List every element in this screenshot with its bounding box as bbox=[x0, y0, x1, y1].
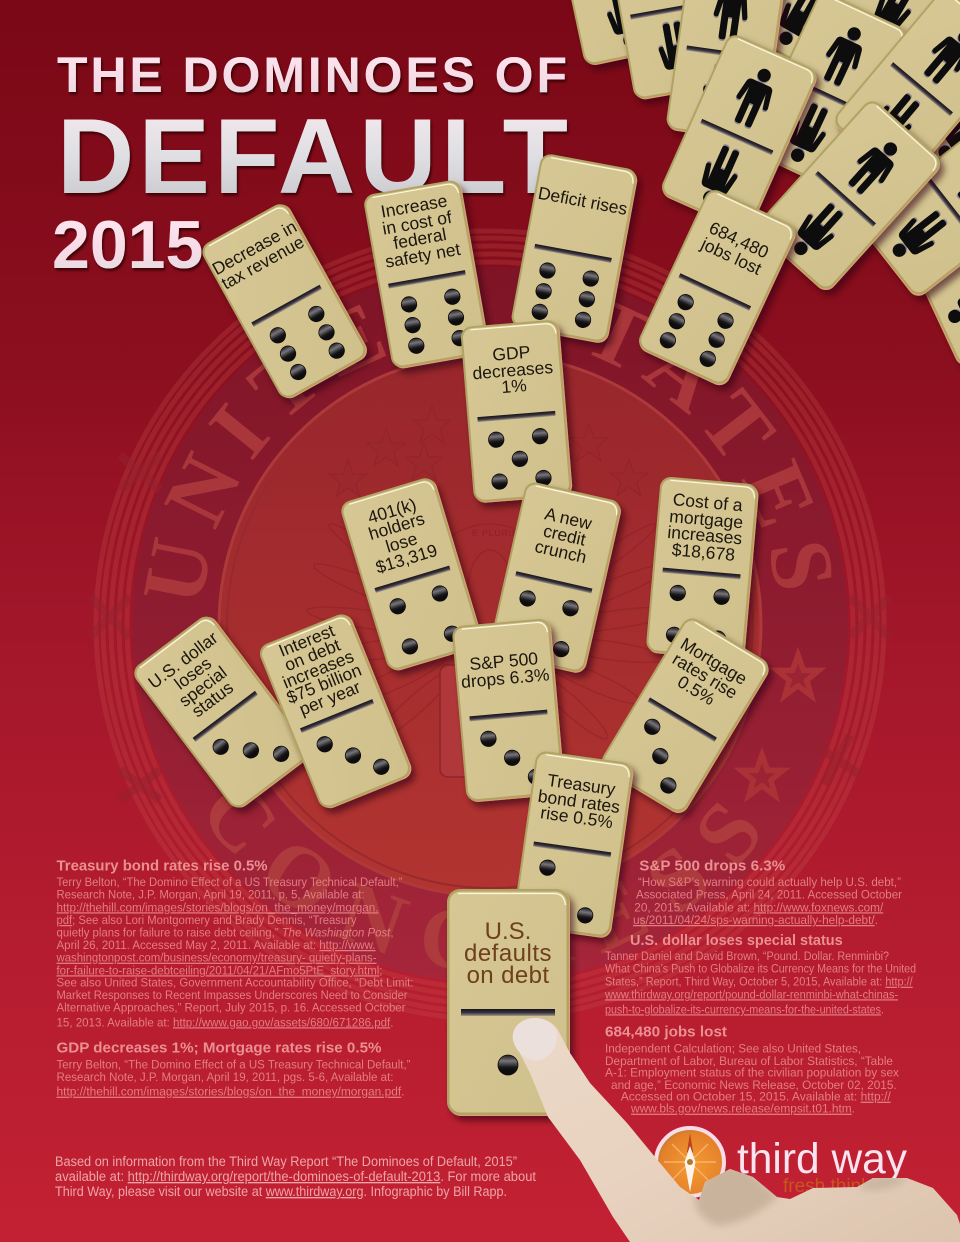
title: THE DOMINOES OF bbox=[57, 47, 567, 103]
sources: left column: for-failure-to-raise-debtceiling/2011/04/21/AFmo5PtE_story.html; bbox=[56, 963, 383, 977]
domino: Mortgage rates rise 0.5%: rates rise bbox=[669, 649, 741, 703]
domino: person M bbox=[903, 20, 960, 203]
domino: A new credit crunch: crunch bbox=[533, 536, 589, 567]
domino: GDP decreases 1% bbox=[460, 319, 573, 504]
congressional seal backdrop: E PLURIBUS UNUM bbox=[472, 528, 565, 538]
sources: right column: What China’s Push to Globalize its Currency Means for the United bbox=[605, 962, 916, 976]
title bbox=[52, 47, 568, 283]
domino: U.S. dollar loses special status: U.S. dollar bbox=[144, 627, 222, 693]
domino: A new credit crunch bbox=[487, 480, 623, 675]
sources: left column: http://thehill.com/images/stories/blogs/on_the_money/morgan. bbox=[56, 900, 378, 914]
domino: Cost of a mortgage increases $18,678 bbox=[645, 476, 759, 661]
domino: 401(k) holders lose $13,319: lose bbox=[383, 528, 420, 557]
logo: third way: third way bbox=[737, 1135, 907, 1183]
domino: person L bbox=[919, 204, 960, 369]
sources: left column: See also United States, Government Accountability Office, “Debt Limit: bbox=[56, 976, 414, 990]
sources: right column bbox=[604, 859, 916, 1116]
domino: person A bbox=[549, 0, 682, 67]
domino: U.S. dollar loses special status: special bbox=[175, 662, 231, 711]
domino: Cost of a mortgage increases $18,678: mortgage bbox=[669, 506, 744, 532]
domino: Decrease in tax revenue: Decrease in bbox=[209, 216, 300, 279]
domino: U.S. dollar loses special status: status bbox=[188, 677, 237, 721]
domino: U.S. defaults on debt bbox=[447, 889, 570, 1116]
domino: U.S. defaults on debt: defaults bbox=[464, 940, 552, 967]
sources: left column: Alternative Approaches,” Report, July 2015, p. 16. Accessed October bbox=[56, 1001, 406, 1015]
domino: Increase in cost of federal safety net: safety net bbox=[384, 239, 462, 272]
sources: right column: push-to-globalize-its-currency-means-for-the-united-states. bbox=[605, 1002, 884, 1016]
domino: 684,480 jobs lost: 684,480 bbox=[706, 217, 772, 262]
sources: left column bbox=[56, 859, 414, 1099]
sources: right column: “How S&P’s warning could actually help U.S. debt,” bbox=[638, 875, 901, 889]
sources: right column: 684,480 jobs lost bbox=[605, 1025, 727, 1041]
sources: right column: www.thirdway.org/report/pound-dollar-renminbi-what-chinas- bbox=[604, 987, 898, 1001]
domino: Mortgage rates rise 0.5%: Mortgage bbox=[677, 634, 751, 689]
domino: Treasury bond rates rise 0.5%: bond rates bbox=[537, 786, 622, 817]
sources: left column: Research Note, J.P. Morgan, April 19, 2011, pgs. 5-6, Available at: bbox=[56, 1070, 394, 1084]
domino: S&P 500 drops 6.3%: drops 6.3% bbox=[460, 664, 550, 692]
domino: Cost of a mortgage increases $18,678: $18,678 bbox=[671, 539, 736, 565]
domino: person B bbox=[604, 0, 733, 101]
domino: Decrease in tax revenue bbox=[198, 200, 371, 403]
domino: Treasury bond rates rise 0.5%: Treasury bbox=[546, 770, 617, 799]
congressional seal backdrop: UNITED STATES bbox=[144, 302, 832, 596]
footer credit: Based on information from the Third Way Report “The Dominoes of Default, 2015” bbox=[55, 1154, 517, 1169]
domino: 401(k) holders lose $13,319: holders bbox=[366, 508, 427, 544]
sources: right column: U.S. dollar loses special status bbox=[630, 933, 843, 949]
sources: right column: States,” Report, Third Way, October 5, 2015, Available at: http:// bbox=[605, 975, 913, 989]
domino: Interest on debt increases $75 billion per year: on debt bbox=[282, 635, 343, 675]
domino: Increase in cost of federal safety net: Increase bbox=[379, 190, 449, 222]
domino: 684,480 jobs lost bbox=[635, 187, 800, 389]
domino: person C bbox=[665, 0, 788, 143]
domino: Decrease in tax revenue: tax revenue bbox=[218, 232, 308, 293]
domino: Increase in cost of federal safety net bbox=[362, 179, 491, 370]
sources: right column: S&P 500 drops 6.3% bbox=[639, 859, 785, 875]
domino: Treasury bond rates rise 0.5%: rise 0.5% bbox=[539, 802, 614, 832]
domino: GDP decreases 1%: decreases bbox=[472, 357, 554, 383]
pile of person dominoes bbox=[549, 0, 960, 369]
domino: Interest on debt increases $75 billion per year: $75 billion bbox=[284, 660, 364, 708]
domino: Deficit rises bbox=[510, 153, 639, 345]
logo: third way bbox=[656, 1128, 907, 1197]
sources: right column: Tanner Daniel and David Brown, “Pound. Dollar. Renminbi? bbox=[605, 949, 889, 963]
sources: left column: Terry Belton, “The Domino Effect of a US Treasury Technical Default,” bbox=[56, 875, 402, 889]
domino: Mortgage rates rise 0.5%: 0.5% bbox=[674, 671, 719, 709]
footer credit bbox=[55, 1154, 536, 1199]
hand pressing the domino bbox=[513, 1018, 960, 1242]
domino: person I bbox=[830, 0, 960, 185]
sources: left column: Terry Belton, “The Domino Effect of a US Treasury Technical Default,” bbox=[56, 1057, 410, 1071]
sources: left column: Treasury bond rates rise 0.5% bbox=[56, 859, 268, 875]
domino: 401(k) holders lose $13,319: $13,319 bbox=[373, 540, 440, 577]
domino: S&P 500 drops 6.3%: S&P 500 bbox=[469, 648, 539, 674]
congressional seal backdrop bbox=[94, 228, 886, 1019]
domino: Interest on debt increases $75 billion per year: increases bbox=[280, 646, 357, 693]
domino: Interest on debt increases $75 billion per year: per year bbox=[296, 677, 363, 719]
domino: U.S. defaults on debt: U.S. bbox=[485, 918, 531, 945]
domino: person D bbox=[746, 0, 911, 192]
sources: left column: GDP decreases 1%; Mortgage rates rise 0.5% bbox=[56, 1041, 382, 1057]
domino: Increase in cost of federal safety net: in cost of bbox=[381, 207, 453, 239]
footer credit: Third Way, please visit our website at www.thirdway.org. Infographic by Bill Rapp. bbox=[55, 1184, 507, 1199]
sources: right column: Department of Labor, Bureau of Labor Statistics, “Table bbox=[605, 1054, 893, 1068]
domino: GDP decreases 1%: 1% bbox=[501, 375, 527, 397]
domino: Cost of a mortgage increases $18,678: increases bbox=[667, 522, 743, 548]
fingernail bbox=[513, 1018, 557, 1060]
sources: left column: Research Note, J.P. Morgan, April 19, 2011, p. 5, Available at: bbox=[56, 888, 364, 902]
domino: 401(k) holders lose $13,319 bbox=[339, 475, 485, 673]
domino: Treasury bond rates rise 0.5% bbox=[512, 750, 635, 939]
domino: 684,480 jobs lost: jobs lost bbox=[697, 233, 765, 279]
domino: Increase in cost of federal safety net: federal bbox=[392, 224, 448, 253]
sources: right column: Associated Press, April 24, 2011. Accessed October bbox=[636, 888, 902, 902]
domino: U.S. dollar loses special status bbox=[130, 612, 315, 813]
footer credit: available at: http://thirdway.org/report/the-dominoes-of-default-2013. For more about bbox=[55, 1169, 536, 1184]
sources: left column: April 26, 2011. Accessed May 2, 2011. Available at: http://www. bbox=[56, 938, 376, 952]
domino: Cost of a mortgage increases $18,678: Cost of a bbox=[672, 489, 744, 515]
logo: third way: fresh thinking bbox=[783, 1176, 896, 1197]
sources: right column: and age,” Economic News Release, October 02, 2015. bbox=[611, 1078, 897, 1092]
domino: Interest on debt increases $75 billion per year bbox=[257, 611, 415, 812]
sources: right column: Independent Calculation; See also United States, bbox=[605, 1042, 861, 1056]
domino: 401(k) holders lose $13,319: 401(k) bbox=[365, 494, 419, 528]
domino: A new credit crunch: A new bbox=[543, 503, 594, 534]
sources: left column: http://thehill.com/images/stories/blogs/on_the_money/morgan.pdf. bbox=[56, 1085, 404, 1099]
sources: left column: Market Responses to Recent Impasses Underscores Need to Consider bbox=[56, 988, 408, 1002]
sources: right column: A-1: Employment status of the civilian population by sex bbox=[605, 1066, 900, 1080]
domino: U.S. dollar loses special status: loses bbox=[170, 653, 215, 694]
sources: left column: quietly plans for failure to raise debt ceiling,” The Washington Post, bbox=[56, 926, 393, 940]
sources: right column: Accessed on October 15, 2015. Available at: http:// bbox=[621, 1090, 891, 1104]
domino: person J bbox=[856, 113, 960, 300]
domino: S&P 500 drops 6.3% bbox=[452, 618, 566, 803]
domino: Deficit rises: Deficit rises bbox=[536, 183, 629, 219]
domino: A new credit crunch: credit bbox=[541, 521, 588, 550]
sources: right column: us/2011/04/24/sps-warning-actually-help-debt/. bbox=[633, 913, 878, 927]
sources: right column: 20, 2015. Available at: http://www.foxnews.com/ bbox=[634, 900, 884, 914]
sources: right column: www.bls.gov/news.release/empsit.t01.htm. bbox=[630, 1102, 855, 1116]
domino: Interest on debt increases $75 billion per year: Interest bbox=[276, 620, 337, 661]
domino: person F bbox=[735, 0, 909, 78]
sources: left column: washingtonpost.com/business/economy/treasury- quietly-plans- bbox=[56, 951, 377, 965]
sources: left column: pdf; See also Lori Montgomery and Brady Dennis, “Treasury bbox=[56, 913, 357, 927]
domino: person K bbox=[753, 97, 945, 295]
domino: Mortgage rates rise 0.5% bbox=[597, 614, 773, 817]
congressional seal backdrop: CONGRESS bbox=[210, 796, 758, 968]
domino: person H bbox=[658, 32, 820, 234]
title: 2015 bbox=[52, 207, 203, 283]
domino: GDP decreases 1%: GDP bbox=[492, 342, 531, 365]
title: DEFAULT bbox=[57, 96, 568, 216]
domino: person G bbox=[830, 0, 960, 70]
domino: U.S. defaults on debt: on debt bbox=[467, 962, 549, 989]
sources: left column: 15, 2013. Available at: http://www.gao.gov/assets/680/671286.pdf. bbox=[56, 1015, 394, 1029]
